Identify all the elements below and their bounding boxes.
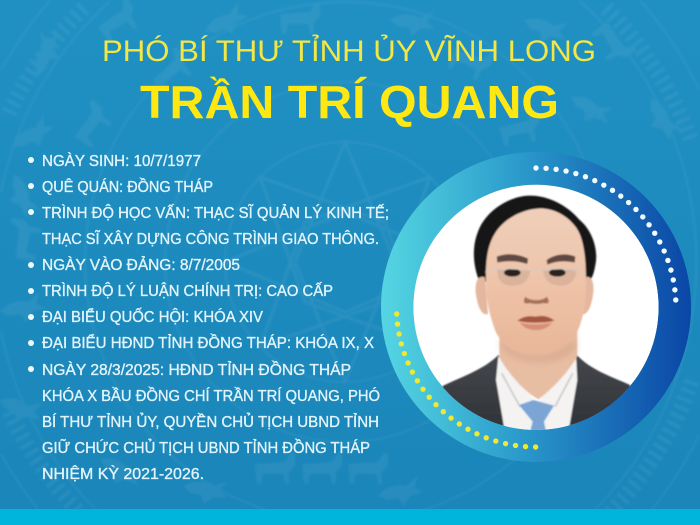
suit xyxy=(442,354,631,426)
political theory level: TRÌNH ĐỘ LÝ LUẬN CHÍNH TRỊ: CAO CẤP xyxy=(42,281,333,300)
nose xyxy=(524,297,549,304)
election note line 2: KHÓA X BẦU ĐỒNG CHÍ TRẦN TRÍ QUANG, PHÓ xyxy=(42,386,380,405)
neck xyxy=(499,327,577,399)
face xyxy=(486,208,586,355)
mouth xyxy=(517,316,554,323)
collar shadows xyxy=(502,373,573,407)
shirt xyxy=(496,354,577,431)
ears xyxy=(476,277,488,314)
hometown: QUÊ QUÁN: ĐỒNG THÁP xyxy=(42,177,213,196)
white dotted arc xyxy=(536,168,676,301)
bottom band xyxy=(0,509,700,525)
yellow dotted arc xyxy=(397,314,536,447)
biography list xyxy=(28,151,389,483)
election note line 3: BÍ THƯ TỈNH ỦY, QUYỀN CHỦ TỊCH UBND TỈNH xyxy=(42,412,379,431)
eyes xyxy=(504,269,521,277)
bullet markers xyxy=(28,157,34,372)
election note line 1: NGÀY 28/3/2025: HĐND TỈNH ĐỒNG THÁP xyxy=(42,360,351,379)
portrait ring xyxy=(381,152,691,462)
lens tint xyxy=(497,269,577,286)
tie xyxy=(519,400,554,432)
glasses xyxy=(485,268,585,274)
neck shadow xyxy=(502,337,576,362)
party admission date: NGÀY VÀO ĐẢNG: 8/7/2005 xyxy=(42,255,240,274)
election note line 5: NHIỆM KỲ 2021-2026. xyxy=(42,464,204,483)
title: position: PHÓ BÍ THƯ TỈNH ỦY VĨNH LONG xyxy=(102,34,596,68)
hair xyxy=(474,196,596,284)
eyebrows xyxy=(497,254,528,264)
election note line 4: GIỮ CHỨC CHỦ TỊCH UBND TỈNH ĐỒNG THÁP xyxy=(42,437,370,457)
portrait photo xyxy=(413,185,659,433)
birth date: NGÀY SINH: 10/7/1977 xyxy=(42,151,201,170)
education line 2: THẠC SĨ XÂY DỰNG CÔNG TRÌNH GIAO THÔNG. xyxy=(42,228,379,248)
national assembly delegate: ĐẠI BIỂU QUỐC HỘI: KHÓA XIV xyxy=(42,306,263,326)
title: name: TRẦN TRÍ QUANG xyxy=(140,76,559,128)
education line 1: TRÌNH ĐỘ HỌC VẤN: THẠC SĨ QUẢN LÝ KINH TẾ; xyxy=(42,202,389,222)
provincial council delegate: ĐẠI BIỂU HĐND TỈNH ĐỒNG THÁP: KHÓA IX, X xyxy=(42,333,374,352)
